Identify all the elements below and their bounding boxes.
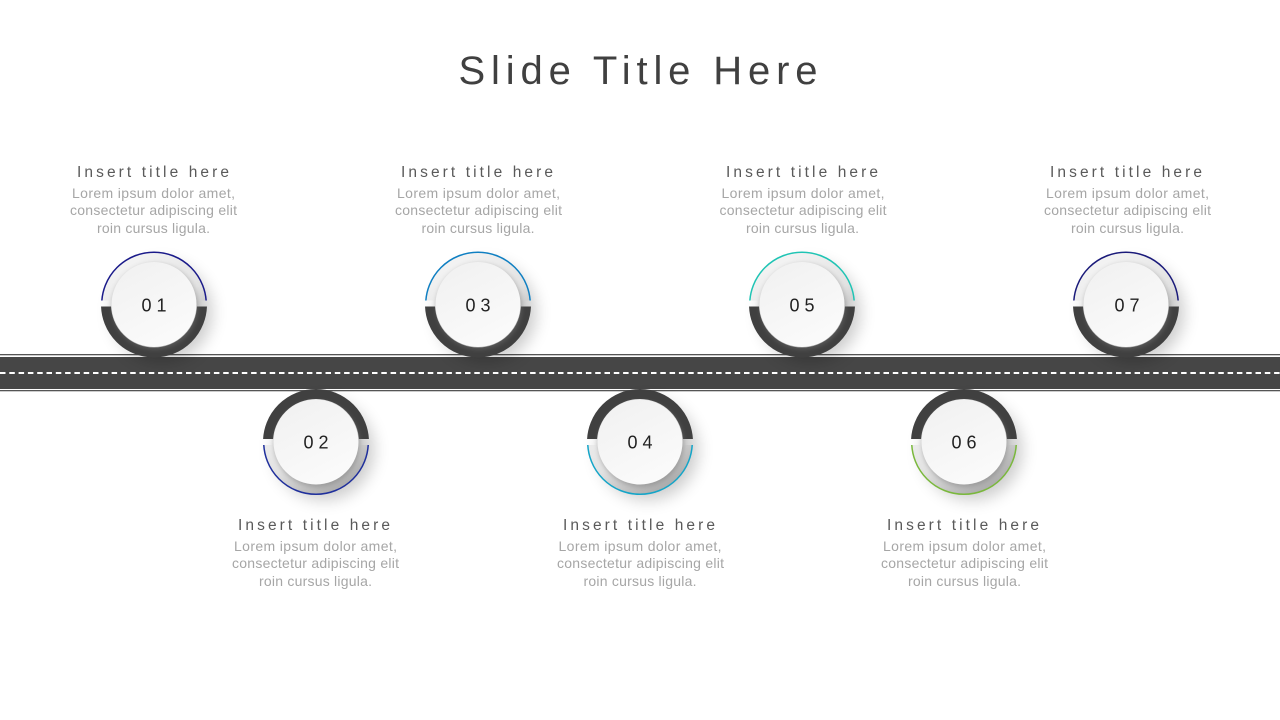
text block 05 bbox=[720, 164, 887, 236]
text block 07: roin cursus ligula. bbox=[1071, 220, 1184, 236]
text block 02: roin cursus ligula. bbox=[259, 573, 372, 589]
text block 01 bbox=[70, 164, 237, 236]
text block 05: consectetur adipiscing elit bbox=[720, 202, 887, 218]
text block 02: consectetur adipiscing elit bbox=[232, 555, 399, 571]
text block 02: Insert title here bbox=[238, 517, 390, 534]
milestone 06: 06 bbox=[952, 432, 976, 452]
text block 03: consectetur adipiscing elit bbox=[395, 202, 562, 218]
milestone 07: 07 bbox=[1114, 296, 1140, 316]
text block 06: consectetur adipiscing elit bbox=[881, 555, 1048, 571]
milestone 02 bbox=[264, 390, 374, 500]
text block 03 bbox=[395, 164, 562, 236]
text block 07: consectetur adipiscing elit bbox=[1044, 202, 1211, 218]
text block 07: Lorem ipsum dolor amet, bbox=[1046, 185, 1209, 201]
text block 03: roin cursus ligula. bbox=[422, 220, 534, 236]
text block 01: Insert title here bbox=[77, 164, 229, 181]
milestone 06 bbox=[912, 390, 1022, 500]
milestone 01: 01 bbox=[142, 296, 166, 316]
milestone 07 bbox=[1074, 252, 1184, 362]
text block 05: Insert title here bbox=[726, 164, 878, 181]
milestone 03: 03 bbox=[466, 296, 490, 316]
text block 04: consectetur adipiscing elit bbox=[557, 555, 724, 571]
milestone 02: 02 bbox=[304, 432, 328, 452]
milestone 01 bbox=[102, 252, 212, 362]
text block 05: Lorem ipsum dolor amet, bbox=[722, 185, 884, 201]
milestone 04: 04 bbox=[628, 432, 652, 452]
text block 01: roin cursus ligula. bbox=[97, 220, 210, 236]
text block 06 bbox=[881, 517, 1048, 589]
milestone 04 bbox=[588, 390, 698, 500]
text block 03: Lorem ipsum dolor amet, bbox=[397, 185, 560, 201]
text block 06: roin cursus ligula. bbox=[908, 573, 1021, 589]
text block 04: Insert title here bbox=[563, 517, 715, 534]
text block 01: Lorem ipsum dolor amet, bbox=[72, 185, 235, 201]
text block 04: Lorem ipsum dolor amet, bbox=[558, 538, 722, 554]
milestone 05 bbox=[750, 252, 860, 362]
title: Slide Title Here bbox=[458, 49, 818, 93]
text block 07 bbox=[1044, 164, 1211, 236]
text block 06: Lorem ipsum dolor amet, bbox=[883, 538, 1046, 554]
text block 06: Insert title here bbox=[887, 517, 1039, 534]
text block 07: Insert title here bbox=[1050, 164, 1202, 181]
text block 04 bbox=[557, 517, 724, 589]
text block 05: roin cursus ligula. bbox=[746, 220, 859, 236]
text block 02: Lorem ipsum dolor amet, bbox=[234, 538, 397, 554]
road bbox=[0, 354, 1280, 391]
text block 03: Insert title here bbox=[401, 164, 553, 181]
text block 04: roin cursus ligula. bbox=[584, 573, 696, 589]
text block 01: consectetur adipiscing elit bbox=[70, 202, 237, 218]
milestone 05: 05 bbox=[790, 296, 814, 316]
text block 02 bbox=[232, 517, 399, 589]
milestone 03 bbox=[426, 252, 536, 362]
